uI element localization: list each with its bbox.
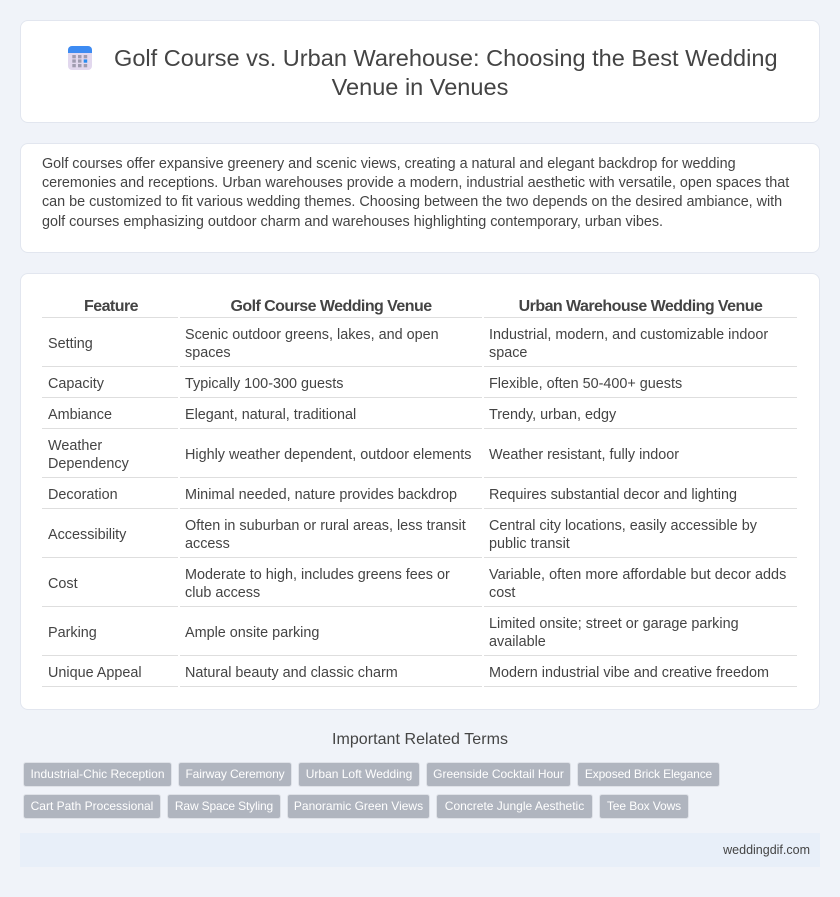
tags: related terms: Raw Space Styling	[175, 799, 273, 813]
panel: comparison table: Limited onsite; street or garage parking	[489, 616, 739, 632]
panel: comparison table: Dependency	[48, 456, 129, 472]
panel: comparison table: Elegant, natural, traditional	[185, 407, 356, 423]
panel: comparison table: Modern industrial vibe and creative freedom	[489, 665, 769, 681]
row: capacity	[48, 376, 682, 392]
tags: related terms: Panoramic Green Views	[294, 799, 423, 813]
panel: comparison table: spaces	[185, 345, 231, 361]
table header	[84, 298, 762, 315]
panel: comparison table: Minimal needed, nature provides backdrop	[185, 487, 457, 503]
panel: comparison table: Ample onsite parking	[185, 625, 319, 641]
row: weather dependency	[48, 438, 679, 472]
tags: related terms: Exposed Brick Elegance	[585, 767, 712, 781]
panel: comparison table: Typically 100-300 guests	[185, 376, 343, 392]
panel: introduction: ceremonies and receptions. Urban warehouses provide a modern, industrial aesthetic with versatile, open spaces that	[42, 175, 789, 191]
panel: comparison table: Decoration	[48, 487, 118, 503]
tags: related terms: Tee Box Vows	[607, 799, 681, 813]
panel: comparison table: Ambiance	[48, 407, 112, 423]
tags: related terms: Concrete Jungle Aesthetic	[445, 799, 584, 813]
intro text	[42, 156, 790, 230]
row: setting	[48, 327, 768, 361]
panel: comparison table: Variable, often more affordable but decor adds	[489, 567, 786, 583]
heading: related terms: Important Related Terms	[332, 731, 508, 748]
panel: comparison table: public transit	[489, 536, 570, 552]
panel: comparison table: Often in suburban or rural areas, less transit	[185, 518, 466, 534]
panel: comparison table: Capacity	[48, 376, 104, 392]
title	[114, 45, 778, 100]
row: decoration	[48, 487, 737, 503]
footer: source: weddingdif.com	[723, 843, 810, 857]
panel: title card	[20, 20, 820, 123]
panel: comparison table	[20, 273, 820, 710]
icon: calendar	[68, 46, 92, 70]
panel: comparison table: Scenic outdoor greens, lakes, and open	[185, 327, 439, 343]
panel: comparison table: Accessibility	[48, 527, 126, 543]
panel: comparison table: Natural beauty and classic charm	[185, 665, 398, 681]
panel: comparison table: Golf Course Wedding Venue	[230, 298, 432, 315]
panel: comparison table: Feature	[84, 298, 138, 315]
panel: introduction: can be customized to fit various wedding themes. Choosing between the two depends on the desired ambiance, with	[42, 194, 782, 210]
panel: comparison table: club access	[185, 585, 260, 601]
panel: introduction: golf courses emphasizing outdoor charm and warehouses highlighting contemporary, urban vibes.	[42, 214, 663, 230]
tags: related terms: Industrial-Chic Reception	[30, 767, 165, 781]
tags: related terms: Cart Path Processional	[31, 799, 153, 813]
tags: related terms: Urban Loft Wedding	[306, 767, 412, 781]
panel: comparison table: Parking	[48, 625, 97, 641]
row: ambiance	[48, 407, 616, 423]
panel: comparison table: Weather	[48, 438, 102, 454]
tags: related terms: Greenside Cocktail Hour	[433, 767, 564, 781]
panel: introduction	[20, 143, 820, 253]
panel: comparison table: cost	[489, 585, 515, 601]
panel: comparison table: Flexible, often 50-400+ guests	[489, 376, 682, 392]
row: parking	[48, 616, 739, 650]
footer bar	[20, 833, 820, 867]
panel: comparison table: Requires substantial decor and lighting	[489, 487, 737, 503]
panel: comparison table: Unique Appeal	[48, 665, 142, 681]
panel: comparison table: Central city locations, easily accessible by	[489, 518, 757, 534]
title: Venue in Venues	[332, 74, 508, 100]
title: Golf Course vs. Urban Warehouse: Choosing the Best Wedding	[114, 45, 778, 71]
panel: introduction: Golf courses offer expansive greenery and scenic views, creating a natural and elegant backdrop for wedding	[42, 156, 736, 172]
panel: comparison table: access	[185, 536, 230, 552]
panel: comparison table: Highly weather dependent, outdoor elements	[185, 447, 471, 463]
panel: comparison table: available	[489, 634, 546, 650]
row: cost	[48, 567, 786, 601]
panel: comparison table: Cost	[48, 576, 78, 592]
panel: comparison table: Setting	[48, 336, 93, 352]
tags: related terms: Fairway Ceremony	[185, 767, 285, 781]
panel: comparison table: Trendy, urban, edgy	[489, 407, 616, 423]
panel: comparison table: Moderate to high, includes greens fees or	[185, 567, 450, 583]
panel: comparison table: space	[489, 345, 527, 361]
panel: comparison table: Urban Warehouse Wedding Venue	[519, 298, 762, 315]
row: accessibility	[48, 518, 757, 552]
panel: comparison table: Weather resistant, fully indoor	[489, 447, 679, 463]
panel: comparison table: Industrial, modern, and customizable indoor	[489, 327, 768, 343]
row: unique appeal	[48, 665, 769, 681]
